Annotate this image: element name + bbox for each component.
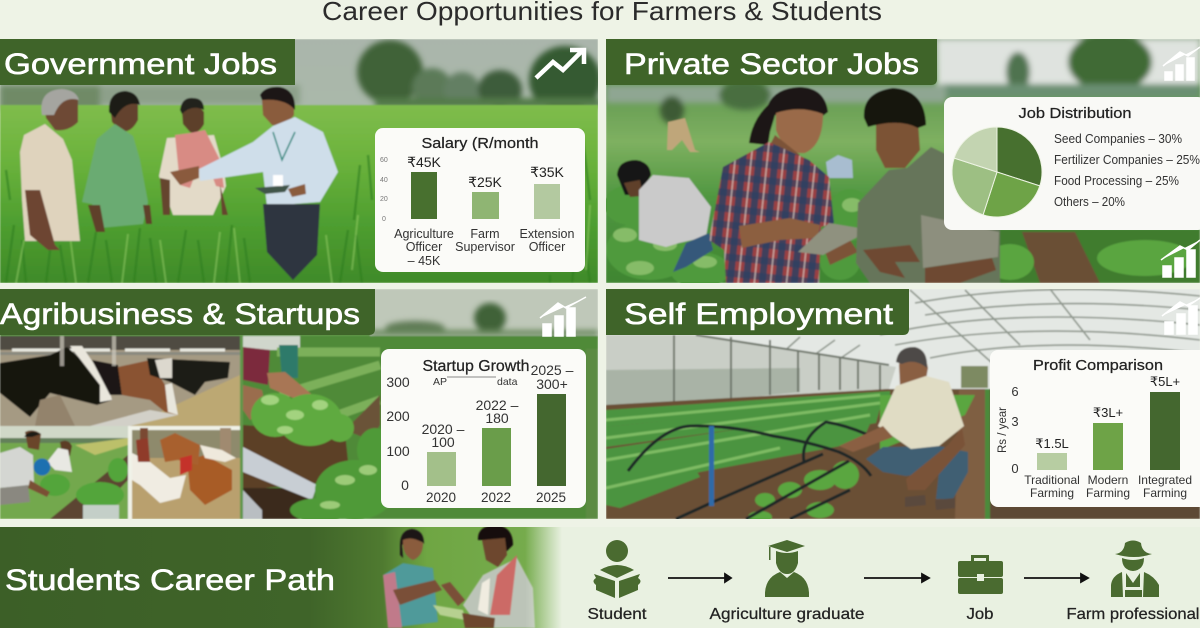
pie legend: Food Processing – 25%: [1054, 174, 1179, 188]
startup values: 2025 –: [531, 362, 574, 378]
person 1 elder: [20, 89, 80, 250]
panel heading: Private Sector Jobs: Private Sector Jobs: [624, 48, 919, 81]
photo: rice field with farmers and officer: [0, 39, 601, 283]
label: Job: Job: [966, 606, 994, 623]
right crop photo: [243, 336, 598, 519]
arrow: [1024, 574, 1088, 582]
panel heading: Government Jobs: [0, 39, 295, 85]
pie legend: Others – 20%: [1054, 195, 1125, 209]
profit values: ₹1.5L: [1035, 436, 1069, 451]
green rows: [606, 391, 890, 508]
arrow: [864, 574, 929, 582]
icon: graduate: [765, 540, 809, 597]
icon: student reading: [594, 540, 640, 598]
startup years: 2022: [481, 490, 511, 505]
lower right ground: [1000, 230, 1200, 282]
profit axis: 0: [1011, 461, 1019, 476]
salary categories: – 45K: [408, 254, 441, 268]
startup axis: [386, 374, 410, 493]
label: Agriculture graduate: Agriculture graduate: [710, 606, 865, 623]
panel heading: Self Employment: [606, 289, 909, 335]
chart title: Startup Growth: [422, 358, 530, 375]
salary values: ₹45K: [407, 154, 442, 170]
woman with plaid shirt: [709, 87, 871, 283]
panel: students career path: [0, 525, 1200, 628]
photo: greenhouse with farmer: [606, 289, 1200, 523]
photo fade: [525, 527, 562, 628]
door: [961, 366, 988, 388]
salary categories: Agriculture: [394, 227, 454, 241]
startup values: [422, 362, 574, 450]
profit categories: Farming: [1143, 486, 1187, 500]
man: [478, 525, 513, 553]
profit axis: Rs / year: [997, 407, 1009, 453]
panel heading: Self Employment: Self Employment: [624, 298, 894, 331]
salary categories: Farm: [470, 227, 500, 241]
salary bars: [411, 172, 560, 219]
profit bars: [1037, 392, 1180, 470]
soil and paths: [606, 389, 990, 519]
startup years: 2020: [426, 490, 456, 505]
greenhouse side wall: [606, 335, 896, 411]
startup axis: 0: [401, 477, 409, 493]
farm sub-photo: [131, 424, 242, 432]
dairy photo: [0, 349, 241, 426]
salary categories: Supervisor: [455, 240, 515, 254]
poultry sub-photo: [128, 426, 132, 519]
background figures: [667, 118, 700, 152]
panel: private sector jobs: [604, 32, 1200, 288]
profit values: [1035, 374, 1180, 451]
icon: growth chart: [1162, 298, 1200, 334]
startup values: 300+: [536, 376, 568, 392]
profit categories: [1024, 473, 1192, 500]
icon: growth chart bottom: [1161, 240, 1200, 277]
chart title: Salary (R/month: [422, 135, 538, 152]
icon: growth chart: [540, 297, 586, 336]
upper right sky and trees: [370, 289, 598, 337]
panel heading: Private Sector Jobs: [606, 39, 937, 85]
pie chart: [952, 127, 1042, 217]
profit categories: Traditional: [1024, 473, 1080, 487]
startup years: 2025: [536, 490, 566, 505]
profit axis: 6: [1011, 384, 1019, 399]
salary axis: 40: [380, 177, 388, 184]
salary axis: 20: [380, 196, 388, 203]
pie legend: [1054, 132, 1200, 209]
salary categories: Officer: [406, 240, 442, 254]
startup axis: 300: [386, 374, 410, 390]
chart subtitle: [433, 376, 518, 388]
photo: dairy, poultry and crops collage: [0, 289, 598, 522]
profit categories: Farming: [1086, 486, 1130, 500]
startup axis: 100: [386, 443, 410, 459]
icon: growth chart top: [1163, 47, 1200, 80]
photo: young agronomists with tablet and laptop: [604, 32, 1200, 288]
salary categories: [394, 228, 574, 265]
salary axis: 60: [380, 157, 388, 164]
startup values: 100: [431, 434, 455, 450]
icon: farmer: [1111, 540, 1159, 597]
panel heading: Agribusiness & Startups: Agribusiness & Startups: [0, 298, 360, 331]
salary values: ₹35K: [530, 164, 565, 180]
chart title: Profit Comparison: [1033, 358, 1163, 374]
man with laptop: [856, 88, 1000, 283]
profit axis: [997, 384, 1019, 476]
pie legend: Seed Companies – 30%: [1054, 132, 1182, 146]
profit categories: Integrated: [1138, 473, 1192, 487]
chart card: job distribution: [944, 97, 1200, 230]
profit values: ₹3L+: [1093, 405, 1123, 420]
salary axis: 0: [382, 216, 386, 223]
startup years: [426, 490, 566, 505]
farmer: [839, 347, 968, 510]
chart subtitle: data: [497, 376, 518, 388]
panel: government jobs: [0, 39, 601, 283]
panel: agribusiness and startups: [0, 289, 598, 522]
green heading band: [0, 527, 562, 628]
person 4 officer: [170, 87, 338, 280]
salary axis: [380, 157, 388, 223]
laptop: [921, 215, 999, 268]
profit categories: Farming: [1030, 486, 1074, 500]
band background: [0, 527, 1200, 628]
salary values: ₹25K: [468, 174, 503, 190]
icon: growth arrow: [536, 50, 584, 78]
greenhouse roof: [606, 289, 1200, 389]
label: Student: Student: [588, 606, 647, 623]
photo: two students shaking hands: [383, 525, 562, 628]
person 2 green shirt: [82, 91, 152, 232]
profit values: ₹5L+: [1150, 374, 1180, 389]
salary categories: Officer: [529, 240, 565, 254]
startup bars: [427, 394, 566, 486]
chart subtitle: AP: [433, 376, 447, 388]
drip pipes: [628, 422, 871, 519]
heading: Students Career Path: Students Career Path: [5, 564, 335, 597]
icon: briefcase: [958, 555, 1003, 594]
startup values: 180: [485, 410, 509, 426]
chart card: startup growth: [381, 349, 586, 508]
woman: [400, 529, 424, 558]
tablet: [798, 222, 858, 256]
startup values: 2020 –: [422, 421, 465, 437]
panel heading: Government Jobs: Government Jobs: [4, 48, 277, 81]
arrow: [668, 574, 731, 582]
worker: [617, 160, 713, 272]
salary values: [408, 156, 564, 187]
profit axis: 3: [1011, 414, 1019, 429]
startup values: 2022 –: [476, 397, 519, 413]
chart card: salary: [375, 128, 585, 272]
chart card: profit comparison: [990, 350, 1200, 507]
label: Farm professional: Farm professional: [1066, 606, 1200, 623]
panel: self employment: [606, 289, 1200, 523]
chart title: Job Distribution: [1018, 105, 1132, 122]
panel heading: Agribusiness & Startups: [0, 289, 375, 335]
startup axis: 200: [386, 408, 410, 424]
salary categories: Extension: [520, 227, 574, 241]
profit categories: Modern: [1088, 473, 1128, 487]
person 3 pink scarf: [159, 98, 228, 215]
